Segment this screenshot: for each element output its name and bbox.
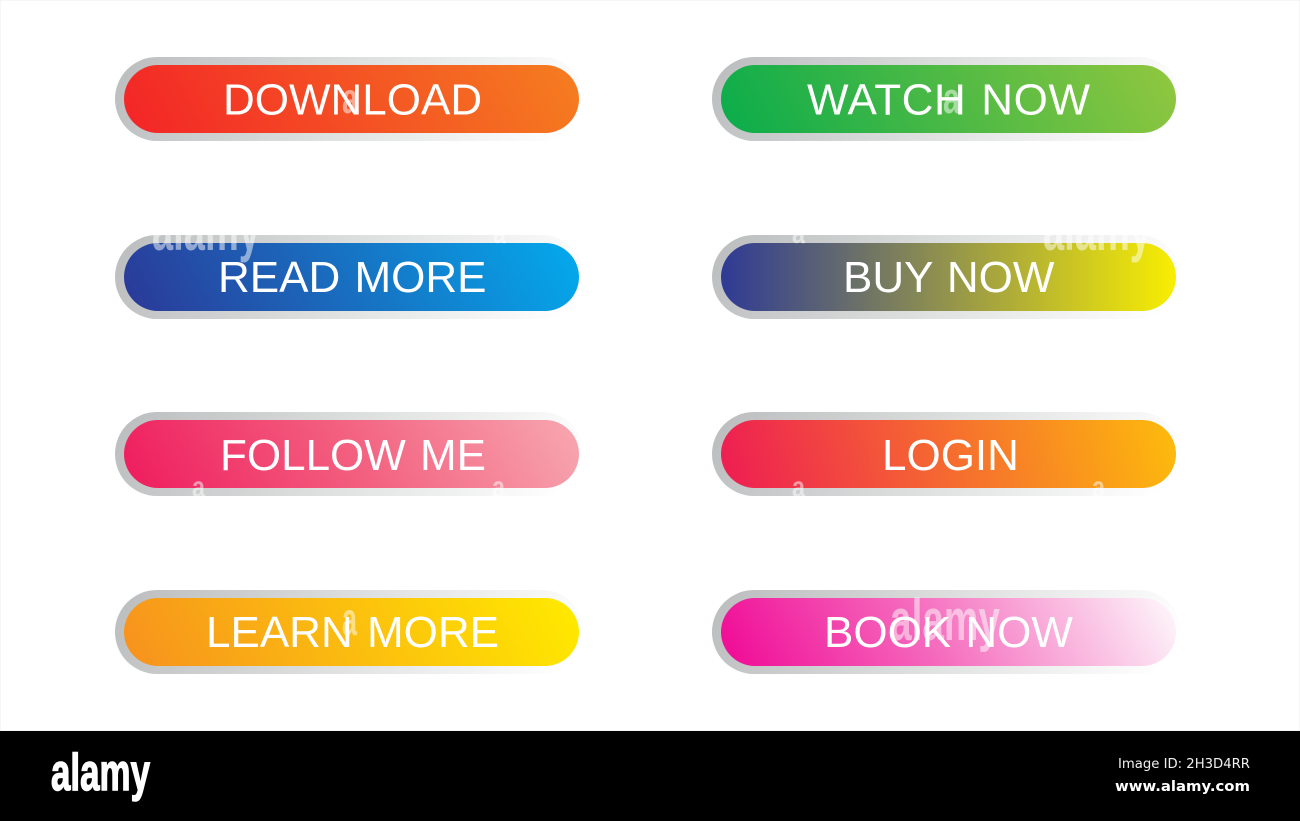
button: download: a xyxy=(342,75,359,123)
button: read more: READ MORE xyxy=(218,253,486,302)
button: login: a xyxy=(1092,471,1105,504)
button: book now: alamy xyxy=(890,588,1000,653)
button: follow me: FOLLOW ME xyxy=(220,431,486,480)
footer logo: alamy: alamy xyxy=(51,744,150,802)
button: watch now xyxy=(712,57,1181,141)
button: download: DOWNLOAD xyxy=(223,76,482,124)
button: buy now: alamy xyxy=(1043,196,1151,263)
button: login: LOGIN xyxy=(882,431,1019,480)
footer url: www.alamy.com xyxy=(1115,779,1250,795)
button: download xyxy=(115,57,584,141)
button: read more xyxy=(115,235,579,319)
button: learn more: a xyxy=(342,593,357,645)
button: buy now xyxy=(712,235,1176,319)
footer bar xyxy=(0,731,1300,821)
button: read more: alamy xyxy=(152,196,260,263)
button: read more: a xyxy=(493,217,506,250)
button: learn more xyxy=(115,590,584,674)
button: follow me: a xyxy=(492,471,505,504)
footer image id: Image ID: 2H3D4RR xyxy=(1118,757,1250,772)
button: buy now: a xyxy=(792,217,805,250)
button: learn more: LEARN MORE xyxy=(206,608,499,657)
button: book now: BOOK NOW xyxy=(824,608,1073,657)
button: follow me: a xyxy=(192,471,205,504)
button: watch now: a xyxy=(943,74,960,123)
button: follow me xyxy=(115,412,584,504)
button: watch now: WATCH NOW xyxy=(807,76,1090,124)
button: book now xyxy=(712,588,1181,674)
button: login xyxy=(712,412,1181,504)
button: login: a xyxy=(792,471,805,504)
button: buy now: BUY NOW xyxy=(843,253,1055,302)
